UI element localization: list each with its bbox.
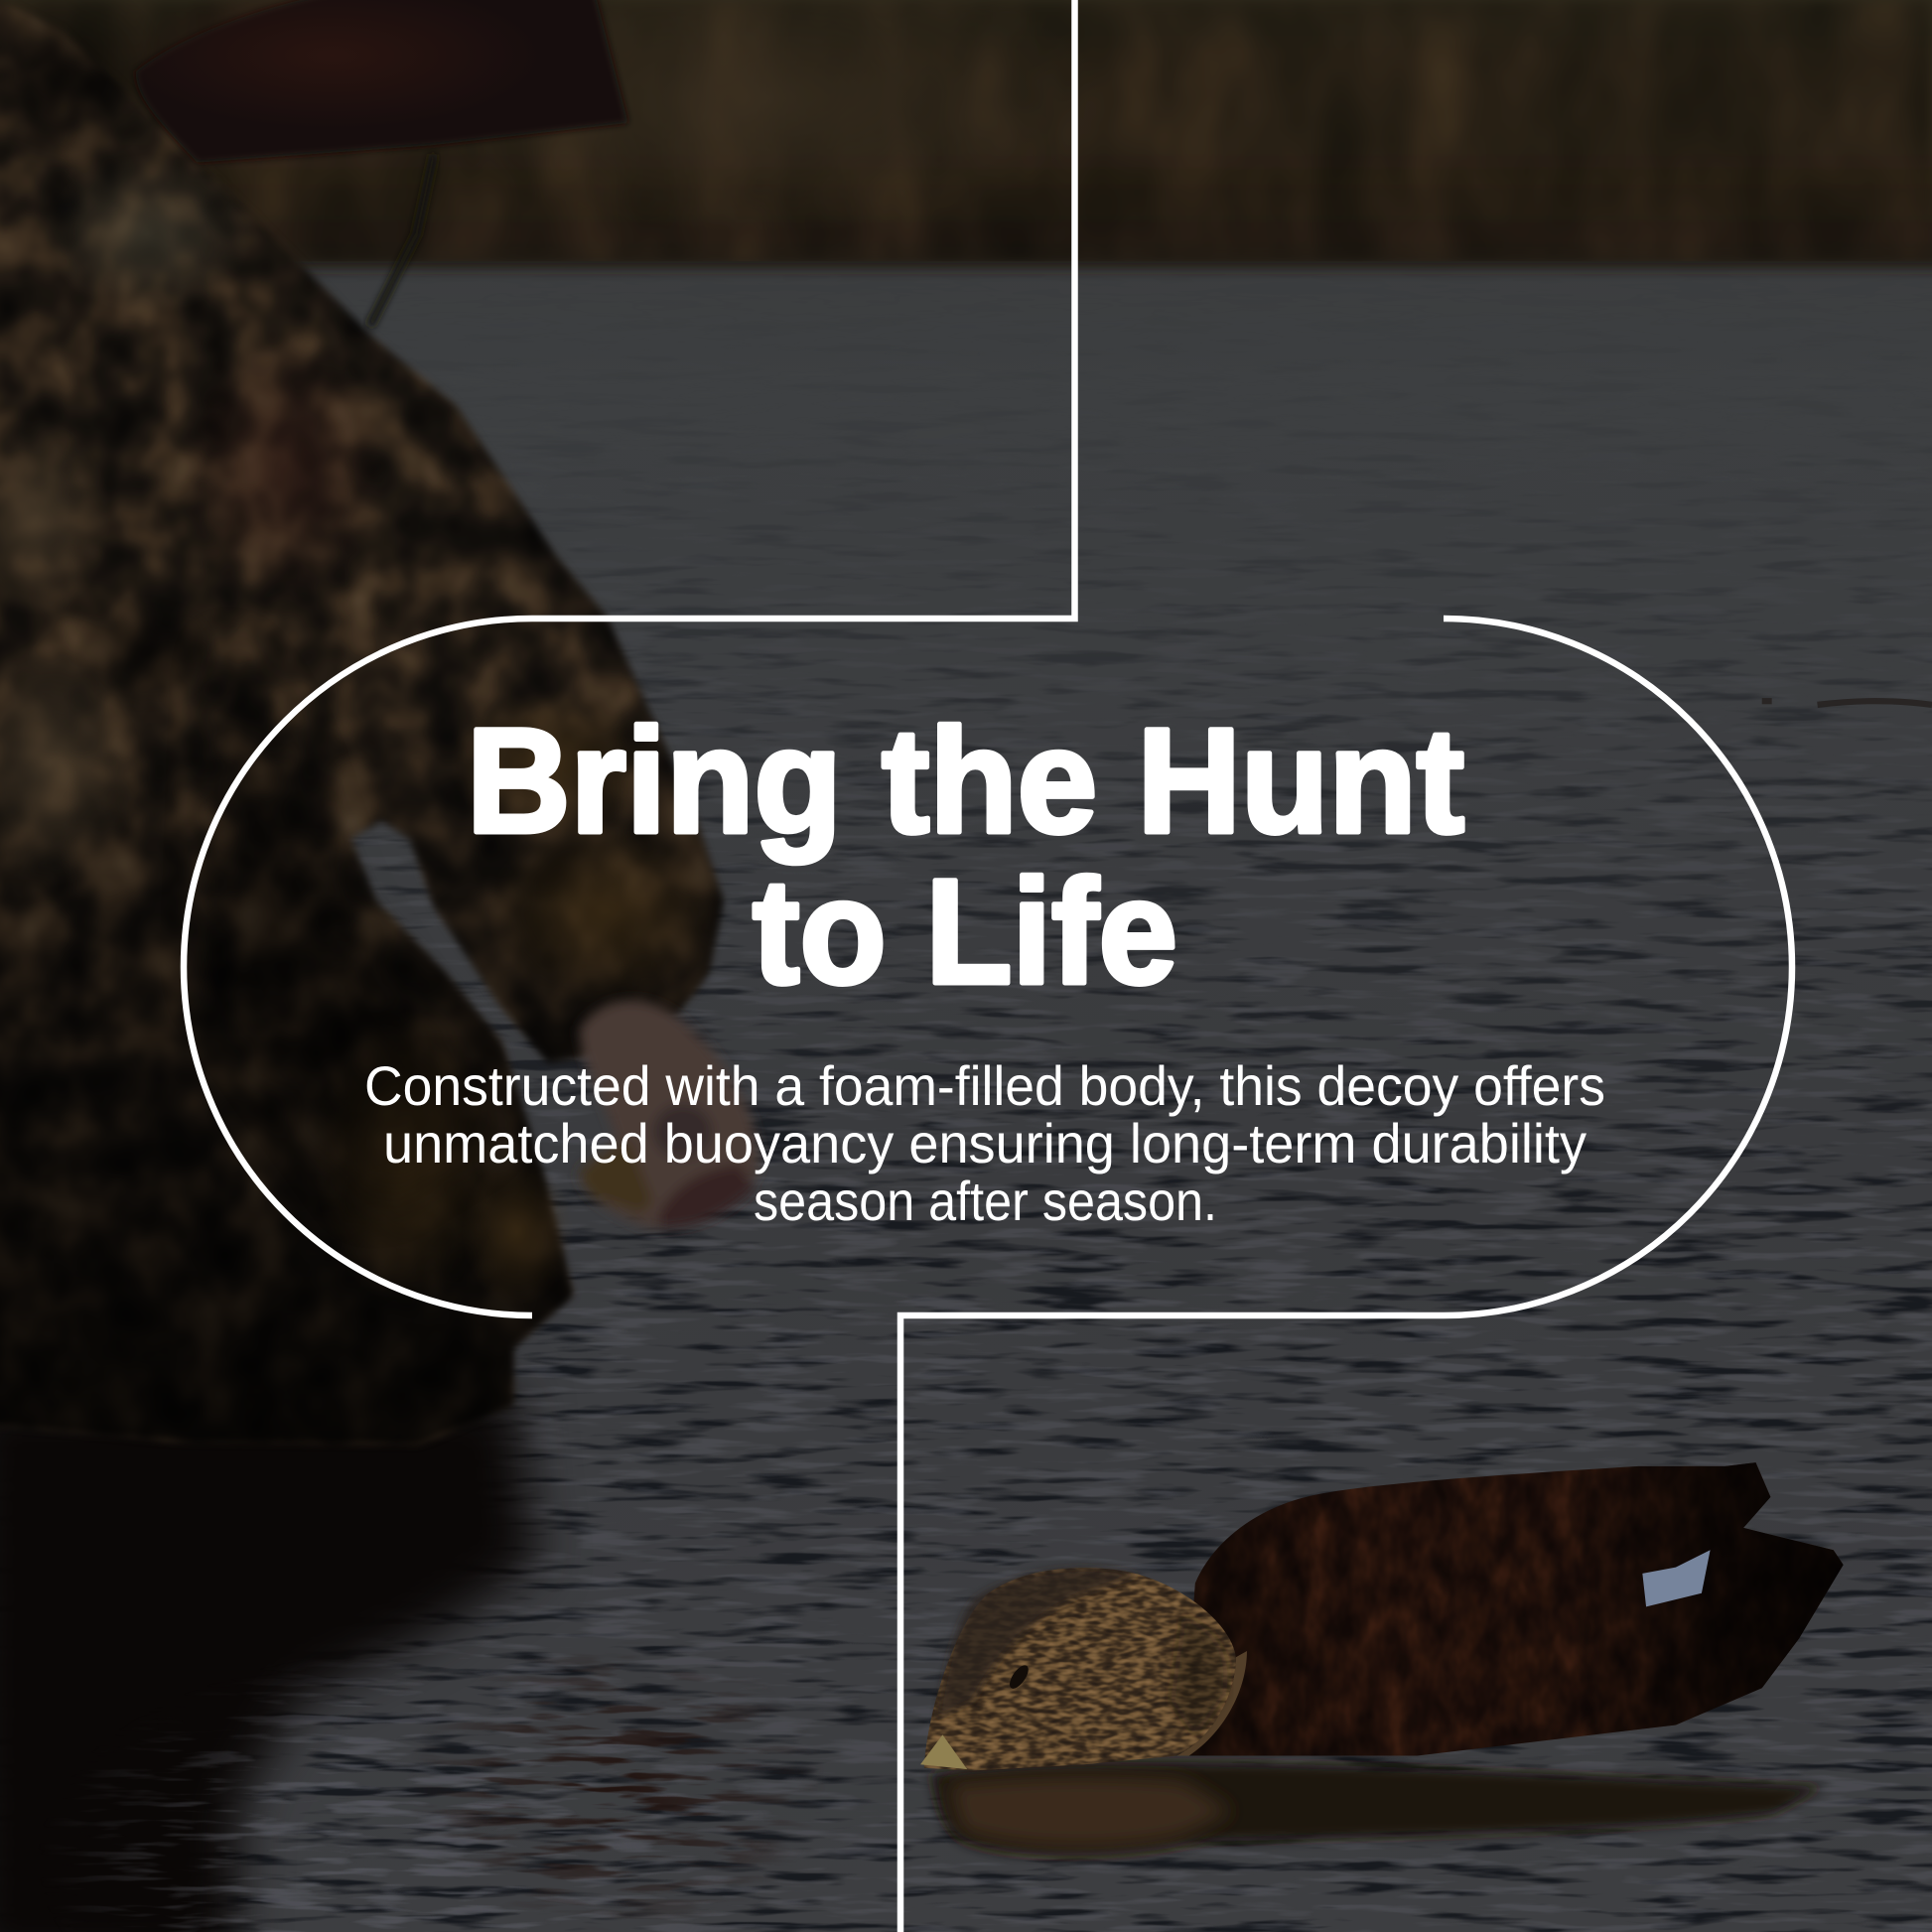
hand xyxy=(579,1001,759,1228)
title: Bring the Hunt xyxy=(467,697,1464,864)
duck decoy reflection xyxy=(930,1762,1824,1856)
decoy bill xyxy=(920,1734,967,1769)
decoy body xyxy=(1182,1462,1844,1756)
lit camouflage patches xyxy=(0,0,721,1307)
floating debris at the right edge xyxy=(1762,701,1932,705)
decoy neck band xyxy=(1176,1651,1247,1756)
glints inside the reflection xyxy=(77,1694,632,1932)
decoy eye xyxy=(1006,1662,1032,1692)
body text: Constructed with a foam-filled body, this decoy offers xyxy=(364,1054,1605,1117)
hat brim xyxy=(136,0,628,163)
title: to Life xyxy=(753,848,1177,1015)
brown streaks on the water xyxy=(435,1658,796,1918)
hat strap xyxy=(369,154,434,327)
hunter in camouflage jacket xyxy=(0,0,724,1445)
outline: left bracket of the pill frame xyxy=(184,0,1074,1315)
outline: right bracket of the pill frame xyxy=(900,619,1792,1932)
wing patch xyxy=(1642,1550,1711,1606)
water surface xyxy=(230,268,1932,1932)
arm shadow xyxy=(216,707,457,1186)
body text xyxy=(364,1054,1605,1232)
title xyxy=(467,697,1464,1015)
far bank of dry grass xyxy=(0,0,1932,269)
body text: season after season. xyxy=(754,1170,1217,1232)
decoy head xyxy=(924,1568,1236,1770)
duck decoy xyxy=(920,1462,1844,1770)
reflection of the hunter in the water xyxy=(0,1376,796,1932)
body text: unmatched buoyancy ensuring long-term durability xyxy=(383,1112,1587,1174)
